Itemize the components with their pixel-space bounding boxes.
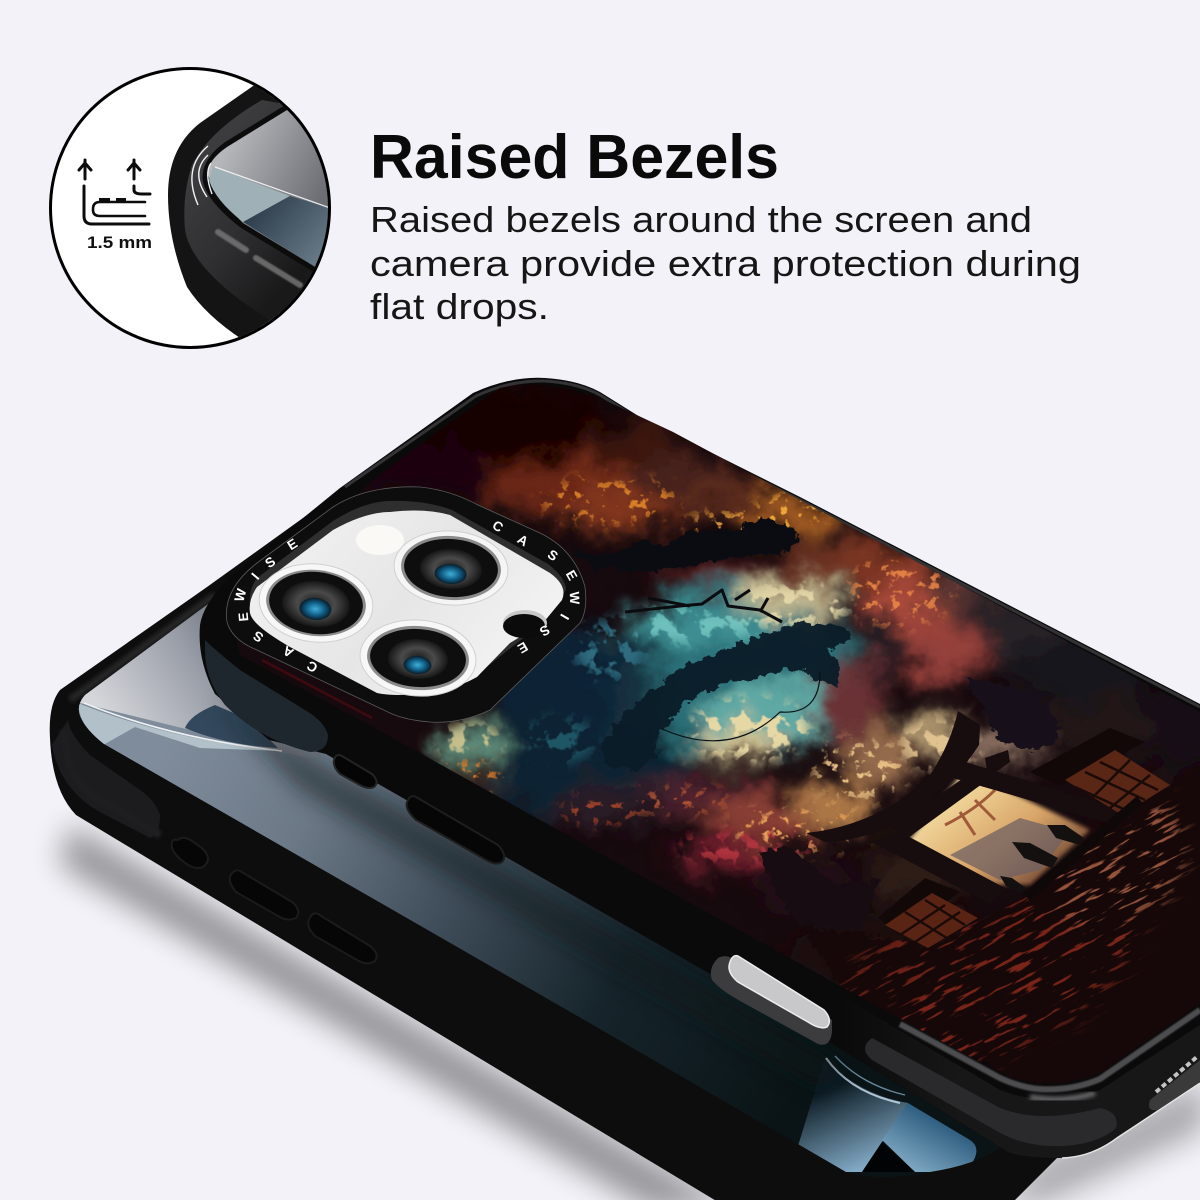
fence [1027, 800, 1140, 897]
white line [215, 167, 330, 208]
corner port patch [1149, 1060, 1200, 1110]
robed figures [1000, 825, 1084, 893]
ring lettering: S [545, 547, 561, 564]
bump carbon patch [205, 640, 328, 752]
bumper inner lighter band [184, 100, 345, 322]
camera plate [250, 511, 564, 695]
lens bottom [357, 616, 479, 700]
camera ring [226, 487, 586, 722]
volume down [308, 913, 377, 963]
blue wedges at screen end [790, 1058, 908, 1172]
black screen edge [206, 108, 317, 270]
distant small gate [945, 790, 995, 835]
small switch [172, 838, 208, 868]
teal and cream cloud flecks [438, 583, 980, 864]
microphone hole [503, 610, 547, 638]
inset circle: bezel close-up [49, 67, 331, 349]
front bumper body [200, 378, 1200, 1158]
right shrine [1030, 728, 1170, 815]
red sliver of art under ring [262, 660, 372, 718]
inner bevel [250, 501, 566, 687]
side switch [334, 755, 377, 788]
shrine window lines [1075, 760, 1158, 812]
lower shrine window [885, 893, 978, 948]
painted colour fields [370, 380, 1200, 1065]
orange flame flecks [436, 478, 950, 852]
white arcs [192, 146, 212, 205]
body copy [370, 199, 1081, 327]
shrine roof [1030, 728, 1144, 778]
back side buttons [172, 838, 377, 963]
ring lettering [232, 517, 582, 675]
diagram label: 1.5 mm [87, 234, 152, 252]
carbon patch [865, 1038, 1117, 1146]
lower pine tree [756, 848, 880, 930]
camera bump [226, 487, 586, 722]
ring lettering: W [232, 587, 249, 603]
shadow cast on screen [215, 700, 850, 1090]
distant mountain [950, 818, 1070, 880]
lower white rim [1062, 1083, 1200, 1158]
ring lettering: E [515, 639, 530, 656]
highlights [218, 232, 300, 285]
volume up [230, 870, 298, 920]
back carbon patch [52, 720, 160, 838]
ring lettering: I [248, 570, 262, 583]
ring lettering: A [280, 643, 296, 660]
ring lettering: E [284, 536, 300, 553]
dragon horns [625, 590, 782, 622]
ring lettering: S [537, 622, 552, 639]
dark notch [185, 705, 278, 748]
back phone bumper [50, 477, 1060, 1200]
gloss highlight [900, 1010, 1200, 1089]
torii top beam [806, 711, 980, 842]
ring lettering: E [236, 612, 251, 622]
torii tie beam [908, 780, 980, 837]
corner gloss band [840, 995, 1200, 1158]
body copy: camera provide extra protection during [370, 243, 1081, 284]
front phone case [200, 378, 1200, 1158]
lower shrine window lines [900, 900, 965, 942]
artwork: dragon and torii painting [220, 370, 1200, 1111]
torii block [985, 750, 1010, 772]
grey reflection [80, 604, 304, 756]
torii gate [806, 711, 1044, 891]
pale reflection [209, 167, 290, 222]
ring lettering: I [557, 611, 572, 622]
lens top right [392, 527, 510, 609]
dragon whisker [660, 672, 820, 741]
ring lettering: S [262, 554, 278, 571]
ring lettering: E [563, 568, 580, 583]
title: Raised Bezels [370, 123, 779, 192]
rim light top edge [345, 381, 1200, 707]
body copy: Raised bezels around the screen and [370, 199, 1032, 240]
diagram: raised lip lines [79, 160, 150, 224]
bumper [168, 60, 360, 340]
diagram: camera bumps [99, 198, 126, 202]
red texture strands [840, 791, 1199, 1071]
body copy: flat drops. [370, 286, 549, 327]
white curve [84, 703, 282, 751]
lower shrine roof [878, 878, 960, 935]
lens left [255, 558, 377, 648]
ring lettering: S [250, 628, 266, 645]
close-up phone corner [168, 60, 360, 340]
torii left pillar [873, 837, 1004, 891]
terrain foreground [807, 774, 1200, 1073]
circle base [50, 68, 330, 348]
back screen [78, 604, 1000, 1177]
shrine lit window [1065, 750, 1170, 815]
bumper highlight strip [64, 595, 215, 835]
torii right pillar [954, 762, 1044, 804]
side button [407, 796, 504, 864]
pale wedge [78, 703, 282, 751]
back phone case and screen [50, 470, 1100, 1200]
circle outline [50, 68, 330, 348]
drop shadow under phones [60, 825, 1200, 1200]
lower shrine [878, 878, 978, 948]
silver button recess [711, 956, 832, 1045]
dragon body [600, 624, 852, 772]
right pine tree [965, 678, 1063, 752]
glowing sky inside the gate [905, 770, 1090, 885]
speaker glint [1156, 1056, 1198, 1092]
screen grey [208, 110, 345, 268]
dragon silhouette [600, 590, 852, 772]
ring lettering: C [490, 517, 506, 536]
ring lettering: A [515, 531, 531, 550]
dark tree line under the flames [572, 518, 800, 572]
ring lettering: C [304, 658, 320, 675]
flash [356, 525, 404, 555]
ring lettering: W [567, 591, 582, 605]
silver button [729, 956, 829, 1028]
dark blue wedge [243, 196, 335, 268]
